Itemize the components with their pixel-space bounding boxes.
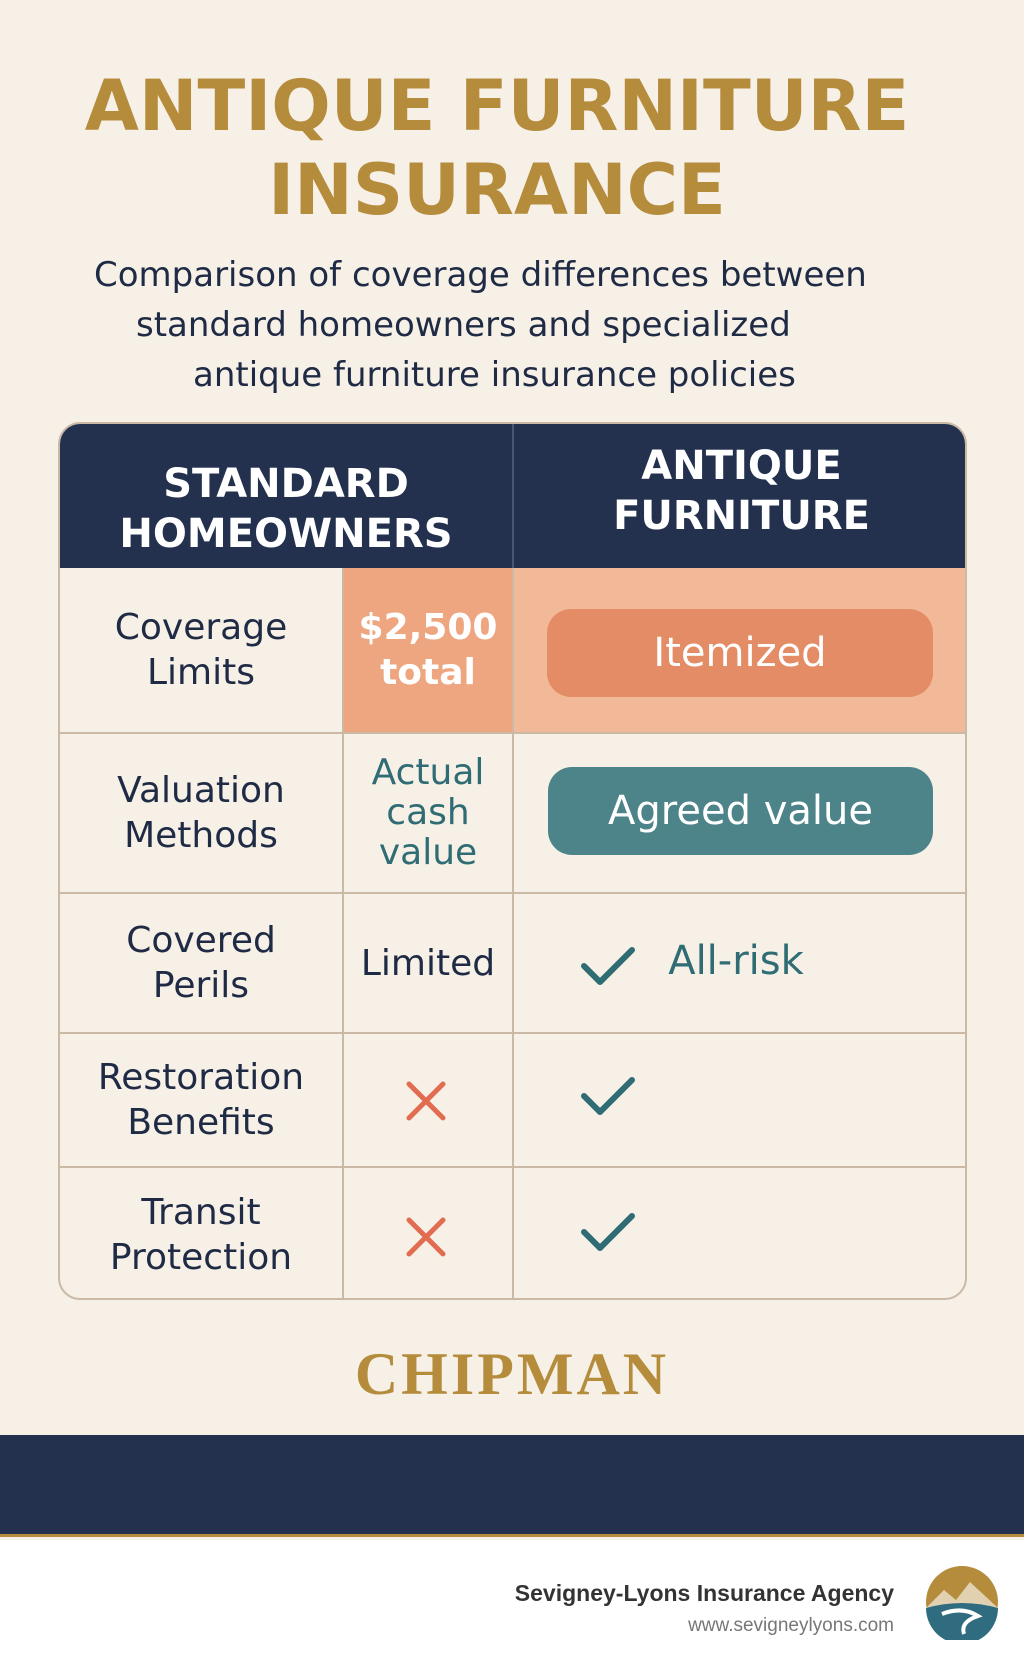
pill: itemized: Itemized — [653, 630, 827, 676]
footer agency text: Sevigney-Lyons Insurance Agency — [515, 1580, 894, 1606]
row: restoration benefits: Restoration — [98, 1057, 304, 1098]
footer — [0, 1540, 1024, 1666]
comparison table — [58, 422, 967, 1300]
row: transit protection: Transit — [141, 1192, 261, 1233]
row: covered perils: Perils — [153, 965, 249, 1006]
icon: cross restoration — [406, 1082, 446, 1120]
row: restoration benefits — [98, 1057, 304, 1143]
brand: chipman: CHIPMAN — [355, 1341, 669, 1407]
icon: cross transit — [406, 1218, 446, 1256]
header: antique furniture — [514, 424, 969, 568]
row: restoration benefits: Benefits — [127, 1102, 275, 1143]
icon: check transit — [581, 1213, 635, 1251]
comparison table: total — [380, 652, 476, 693]
row: transit protection — [110, 1192, 292, 1278]
subtitle: standard homeowners and specialized — [136, 305, 791, 345]
title — [85, 65, 909, 231]
icon: check restoration — [581, 1077, 635, 1115]
row: covered perils: Covered — [126, 920, 276, 961]
row: coverage limits: Coverage — [115, 607, 287, 648]
row: coverage limits: Limits — [147, 652, 255, 693]
footer agency text — [515, 1580, 894, 1636]
text: all-risk: All-risk — [668, 938, 804, 984]
pill: itemized — [547, 609, 933, 697]
row: covered perils — [126, 920, 276, 1006]
title: ANTIQUE FURNITURE — [85, 65, 909, 147]
subtitle: antique furniture insurance policies — [193, 355, 796, 395]
pill: agreed value: Agreed value — [608, 788, 873, 834]
coverage row highlight — [342, 568, 514, 732]
header: antique furniture: FURNITURE — [613, 493, 870, 539]
icon: agency logo — [926, 1566, 998, 1640]
row: transit protection: Protection — [110, 1237, 292, 1278]
row: valuation methods: Methods — [124, 815, 278, 856]
header: standard homeowners: HOMEOWNERS — [119, 511, 453, 557]
icon: check all-risk — [581, 947, 635, 985]
comparison table: value — [379, 832, 477, 873]
comparison table: Actual — [372, 752, 484, 793]
row: valuation methods: Valuation — [117, 770, 285, 811]
row: valuation methods — [117, 770, 285, 856]
title: INSURANCE — [268, 149, 726, 231]
comparison table: cash — [386, 792, 470, 833]
row: coverage limits — [115, 607, 287, 693]
navy band — [0, 1435, 1024, 1537]
subtitle — [94, 255, 867, 395]
subtitle: Comparison of coverage differences between — [94, 255, 867, 295]
header: standard homeowners — [60, 424, 512, 568]
footer agency text: www.sevigneylyons.com — [688, 1615, 894, 1636]
header: standard homeowners: STANDARD — [163, 461, 409, 507]
comparison table: Limited — [361, 942, 495, 984]
pill: agreed value — [548, 767, 933, 855]
comparison table: $2,500 — [359, 607, 497, 648]
header: antique furniture: ANTIQUE — [641, 443, 842, 489]
